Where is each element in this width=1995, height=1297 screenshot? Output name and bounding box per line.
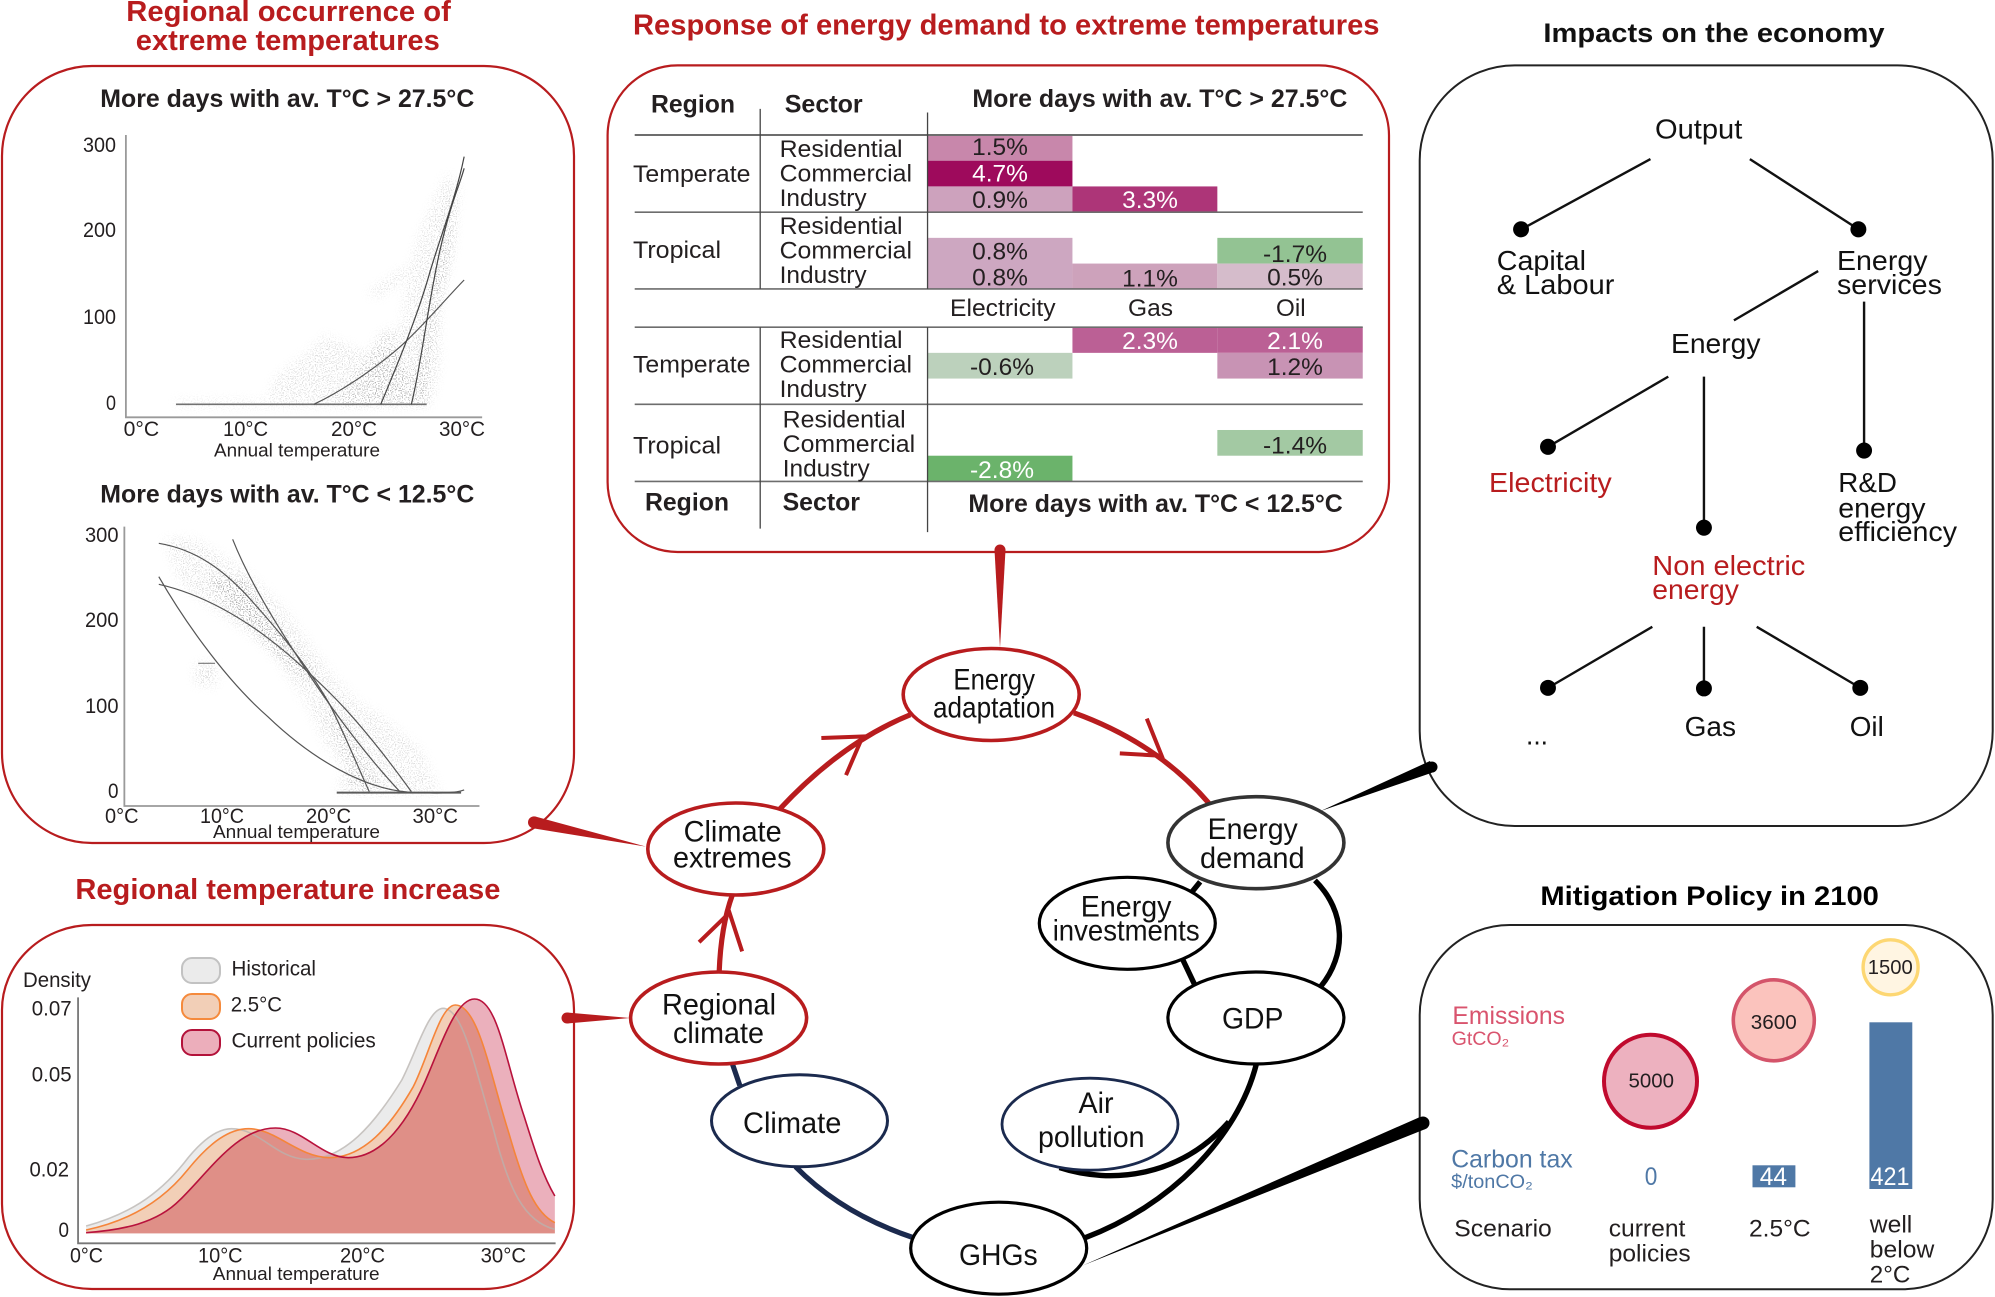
tree labels: Energy [1837, 245, 1928, 276]
region labels: Tropical [633, 432, 721, 460]
node: climate: Climate [743, 1107, 841, 1140]
connector: GHGs to mitigation panel [1082, 1116, 1430, 1266]
tree labels: energy [1652, 574, 1739, 605]
density chart: 10°C [198, 1245, 243, 1268]
density chart: 0°C [70, 1245, 103, 1268]
density chart: 0.02 [30, 1159, 69, 1182]
tree labels: efficiency [1838, 516, 1957, 547]
scatter chart: hot days: 0 [106, 392, 116, 415]
panel frame [608, 65, 1389, 552]
cell values [970, 134, 1327, 484]
tree labels: & Labour [1497, 269, 1614, 300]
legend: Current policies [232, 1030, 376, 1053]
connector: climate extremes to occurrence panel [528, 816, 646, 847]
node: air pollution: Air [1078, 1087, 1114, 1120]
panel: response of energy demand [608, 10, 1389, 552]
connector: regional climate to temperature panel [562, 1012, 630, 1024]
density chart: Annual temperature [213, 1264, 380, 1284]
sector labels: Industry [780, 262, 867, 289]
black links [1060, 880, 1339, 1238]
cell values: 2.3% [1122, 328, 1178, 355]
sector labels: Residential [780, 213, 903, 240]
scenario labels: 2°C [1870, 1262, 1910, 1289]
node: GHGs: GHGs [959, 1239, 1038, 1272]
tree labels: Energy [1671, 328, 1760, 359]
scenario labels: current [1609, 1216, 1686, 1243]
node: air pollution: pollution [1038, 1121, 1144, 1154]
density chart: 30°C [481, 1245, 526, 1268]
cell values: 1.1% [1122, 265, 1178, 292]
node: energy adaptation: adaptation [933, 692, 1055, 725]
table headers: Region [651, 90, 735, 118]
tree labels: services [1837, 269, 1942, 300]
node: energy adaptation [903, 648, 1079, 740]
region labels: Temperate [633, 161, 750, 188]
scatter chart: cold days: Annual temperature [213, 822, 380, 842]
cell values: -0.6% [970, 354, 1034, 381]
heatmap cells [928, 135, 1363, 481]
sector labels: Commercial [780, 352, 912, 378]
node: energy demand: demand [1200, 842, 1305, 875]
node: regional climate: climate [673, 1017, 764, 1050]
emissions bubble: current policies: 5000 [1628, 1070, 1674, 1093]
node: energy investments: Energy [1081, 891, 1172, 924]
cell values: 1.2% [1267, 354, 1323, 381]
density chart: 0 [58, 1219, 69, 1242]
node: climate extremes: extremes [673, 841, 792, 874]
table headers: Region [645, 489, 729, 517]
panel: impacts on the economy [1420, 18, 1993, 826]
sector labels: Industry [780, 185, 867, 212]
emissions label: GtCO₂ [1452, 1029, 1509, 1050]
scatter chart: cold days: 20°C [306, 805, 351, 828]
sector labels: Residential [780, 327, 903, 354]
node: air pollution [1002, 1078, 1178, 1170]
connector: energy demand to impacts panel [1321, 761, 1438, 811]
node: regional climate [631, 972, 807, 1064]
sector labels: Residential [783, 406, 906, 434]
legend: Historical [232, 958, 316, 981]
cell values: 0.8% [972, 265, 1028, 292]
scatter chart: hot days: 100 [83, 306, 116, 329]
tree labels: Non electric [1652, 550, 1805, 581]
legend [182, 958, 376, 1055]
scatter chart: cold days: 0°C [105, 805, 138, 828]
fuel labels: Oil [1276, 295, 1306, 322]
scenario labels: well [1869, 1212, 1912, 1239]
emissions bubble: current policies [1604, 1035, 1697, 1128]
cell values: 0.8% [972, 239, 1028, 266]
density chart: 20°C [340, 1245, 385, 1268]
density chart: 0.07 [32, 998, 72, 1021]
cell values: -2.8% [970, 457, 1034, 484]
tree labels: Oil [1850, 711, 1884, 742]
density chart: Density [23, 969, 91, 992]
scenario labels [1454, 1212, 1935, 1289]
fuel labels [950, 295, 1306, 322]
density chart [23, 969, 556, 1284]
heading: impacts on the economy: Impacts on the economy [1543, 18, 1885, 48]
scatter chart: hot days: Annual temperature [214, 440, 380, 460]
tree labels: Gas [1685, 711, 1736, 742]
cell values: 4.7% [972, 160, 1028, 187]
subheading: hot days: More days with av. T°C > 27.5°C [100, 85, 474, 113]
scatter chart: cold days [85, 524, 479, 842]
heading: mitigation policy: Mitigation Policy in 2100 [1540, 881, 1879, 911]
carbon tax label [1451, 1145, 1573, 1193]
scatter chart: cold days: 200 [85, 609, 118, 632]
node: climate extremes [648, 803, 824, 895]
cell values: 1.5% [972, 134, 1028, 161]
scatter chart: cold days: 30°C [412, 805, 458, 828]
carbon tax bar: 2.5°C [1752, 1163, 1795, 1191]
panel: regional temperature increase [2, 874, 574, 1289]
table headers: More days with av. T°C > 27.5°C [972, 85, 1347, 113]
cell values: 2.1% [1267, 328, 1323, 355]
cell values: -1.7% [1263, 241, 1327, 268]
carbon tax label: Carbon tax [1451, 1145, 1573, 1173]
node: regional climate: Regional [662, 989, 776, 1022]
scatter chart: cold days: 10°C [200, 805, 244, 828]
region labels: Temperate [633, 352, 750, 378]
fuel labels: Gas [1128, 295, 1173, 322]
cell values: 0.5% [1267, 265, 1323, 292]
diagram links [699, 713, 1339, 1238]
cell values: 3.3% [1122, 187, 1178, 214]
scatter chart: cold days: 0 [108, 780, 118, 803]
connector: energy adaptation to response panel [994, 544, 1006, 648]
emissions bubble: well below 2°C: 1500 [1868, 957, 1913, 979]
panel frame [2, 925, 574, 1289]
scenario labels: below [1870, 1237, 1935, 1264]
emissions bubble: 2.5°C: 3600 [1751, 1011, 1797, 1034]
heading: response of energy demand: Response of energy demand to extreme temperatures [633, 10, 1380, 42]
tree labels: Output [1655, 114, 1743, 144]
scatter chart: hot days: 20°C [331, 418, 377, 441]
sector labels: Commercial [780, 160, 912, 187]
panel frame [2, 66, 574, 843]
legend: 2.5°C [231, 994, 282, 1017]
carbon tax value: current policies: 0 [1645, 1163, 1657, 1191]
node: GDP: GDP [1222, 1003, 1283, 1036]
sector labels: Commercial [783, 431, 915, 458]
panel frame [1420, 925, 1993, 1289]
cell values: 0.9% [972, 187, 1028, 214]
tree labels: energy [1838, 492, 1926, 524]
table headers: More days with av. T°C < 12.5°C [968, 490, 1343, 518]
scatter chart: cold days: 100 [85, 695, 118, 718]
carbon tax bar: well below 2°C: 421 [1870, 1163, 1910, 1191]
tree labels: Capital [1497, 245, 1586, 276]
node: climate [712, 1075, 888, 1167]
node: energy adaptation: Energy [953, 664, 1035, 697]
table headers: Sector [785, 90, 863, 118]
carbon tax bar: 2.5°C: 44 [1760, 1163, 1787, 1191]
scatter chart: hot days: 10°C [223, 418, 268, 441]
sector labels [780, 136, 915, 483]
region labels: Tropical [633, 237, 721, 264]
scatter chart: hot days: 300 [83, 134, 116, 157]
panel: regional occurrence of extreme temperatures [2, 0, 574, 843]
scenario labels: Scenario [1454, 1216, 1552, 1243]
heading: regional occurrence [126, 0, 451, 57]
red arrows [699, 713, 1209, 972]
emissions bubble: well below 2°C [1863, 940, 1918, 995]
panel: mitigation policy in 2100 [1420, 881, 1993, 1289]
panel frame [1420, 65, 1993, 826]
node: climate extremes: Climate [684, 816, 782, 849]
node: GDP [1168, 972, 1344, 1064]
region labels [633, 161, 750, 460]
density chart: 0.05 [32, 1064, 72, 1087]
navy links [732, 1064, 913, 1238]
carbon tax label: $/tonCO₂ [1451, 1172, 1533, 1193]
sector labels: Industry [780, 376, 867, 403]
scatter chart: hot days: 200 [83, 219, 116, 242]
subheading: cold days: More days with av. T°C < 12.5°C [100, 481, 474, 509]
tree connectors and nodes [1513, 159, 1872, 696]
node: energy investments: investments [1053, 915, 1200, 948]
fuel labels: Electricity [950, 295, 1056, 322]
node: energy demand [1168, 797, 1344, 889]
tree labels: R&D [1838, 467, 1897, 498]
scatter chart: hot days: 30°C [439, 418, 485, 441]
sector labels: Residential [780, 136, 903, 163]
table headers: Sector [783, 489, 860, 517]
scatter chart: cold days: 300 [85, 524, 118, 547]
scatter chart: hot days: 0°C [124, 418, 159, 441]
scenario labels: policies [1609, 1241, 1691, 1268]
table headers [645, 85, 1347, 518]
emissions label: Emissions [1452, 1002, 1565, 1030]
node: GHGs [911, 1202, 1087, 1294]
scenario labels: 2.5°C [1749, 1216, 1811, 1243]
heading: regional temperature increase: Regional temperature increase [75, 874, 500, 906]
sector labels: Commercial [780, 238, 912, 265]
scatter chart: hot days [83, 134, 485, 460]
tree labels: Electricity [1489, 467, 1612, 498]
cell values: -1.4% [1263, 433, 1327, 460]
sector labels: Industry [783, 456, 870, 483]
emissions bubble: 2.5°C [1733, 980, 1814, 1061]
tree labels [1489, 114, 1957, 751]
node: energy investments [1039, 877, 1215, 969]
tree labels: ... [1526, 720, 1548, 751]
node: energy demand: Energy [1208, 813, 1298, 846]
carbon tax bar: well below 2°C [1869, 1022, 1912, 1191]
heading: regional occurrence: extreme temperatures [136, 25, 440, 57]
emissions label [1452, 1002, 1565, 1050]
